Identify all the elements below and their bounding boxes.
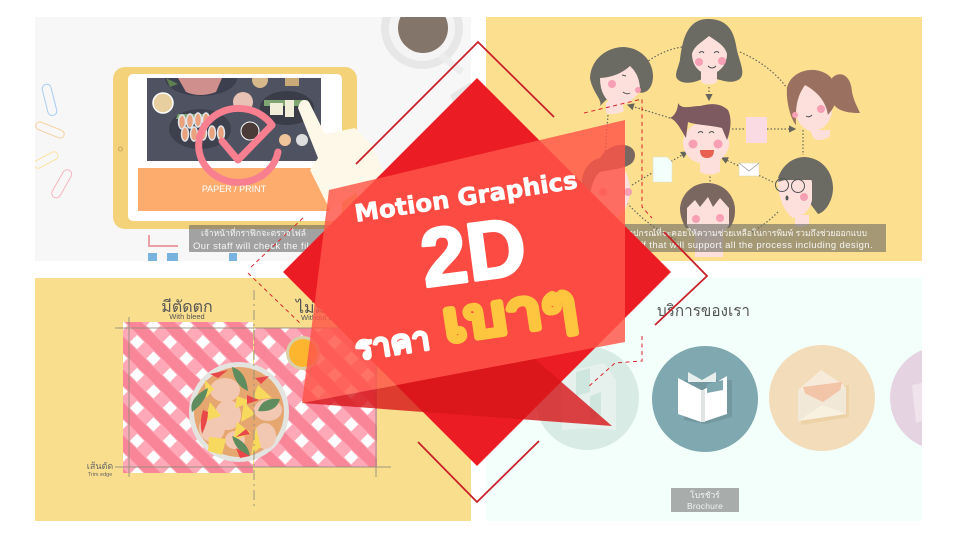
person: centre (670, 103, 731, 174)
trim guide lines (115, 290, 391, 509)
label: trim edge: Trim edge (88, 472, 112, 478)
person: bottom (680, 183, 735, 257)
title text (353, 166, 580, 367)
caption: support staff: experienced staff that will support all the process including design. (567, 240, 873, 251)
label: brochure: Brochure (687, 501, 723, 511)
panel: team network (486, 17, 922, 261)
title: 2D: 2D (415, 201, 531, 305)
caption: staff check: Our staff will check the file (193, 241, 315, 252)
label: trim edge: เส้นตัด (87, 461, 113, 471)
desk items under the tablet (148, 235, 237, 261)
title: price word: ราคา (353, 319, 432, 367)
person: upper left (590, 47, 653, 114)
panel: our services (486, 278, 960, 521)
heading: without bleed: Without bleed (301, 313, 347, 322)
tablecloth without bleed (254, 328, 377, 467)
icon: pink document (746, 117, 767, 143)
heading: without bleed (294, 298, 366, 322)
dotted links (605, 47, 803, 240)
service circle: buildings (535, 346, 639, 450)
translucent banner (302, 120, 625, 403)
band label: PAPER / PRINT (202, 184, 267, 194)
caption: support staff (624, 224, 886, 252)
icon: pointing hand (298, 100, 385, 210)
title: Motion Graphics: Motion Graphics (353, 166, 579, 228)
heading: with bleed: With bleed (169, 312, 205, 321)
label: brochure: โบรชัวร์ (690, 490, 720, 500)
small bowl (286, 336, 320, 370)
caption: staff check (189, 225, 339, 252)
person: top (676, 19, 742, 84)
label: brochure (671, 488, 739, 512)
icon: envelope (739, 163, 759, 176)
panel: bleed and trim (35, 278, 471, 521)
tablet frame (113, 67, 357, 229)
caption: staff check: เจ้าหน้าที่กราฟิกจะตรวจไฟล์ (201, 227, 306, 238)
caption: support staff: ครบครันด้วยอุปกรณ์ที่จะคอยให้ความช่วยเหลือในการพิมพ์ รวมถึงช่วยออกแบบ (581, 227, 867, 239)
title: gentle price word: เบาๆ (438, 272, 580, 354)
banner fold shadow (302, 359, 612, 426)
tablecloth with bleed (123, 322, 253, 473)
orange band (138, 168, 330, 211)
person: right (787, 70, 860, 140)
person: lower right (776, 157, 833, 227)
service circle: partial (890, 350, 922, 446)
label: trim edge (87, 461, 113, 478)
outline diamond corners (356, 42, 707, 502)
person: left, behind banner (582, 145, 635, 220)
service circle: brochure (652, 346, 758, 452)
grey object (450, 82, 471, 102)
heading: without bleed: ไม่มีตัดตก (294, 298, 366, 317)
red diamond (283, 78, 671, 466)
photo of food on tablet (147, 78, 321, 161)
dashed accent lines (248, 99, 652, 388)
icon: white document (653, 157, 672, 182)
heading: with bleed: มีตัดตก (161, 298, 213, 316)
service circle: envelope (769, 345, 875, 451)
tablet screen (128, 74, 342, 221)
icon: paper clips (33, 83, 73, 199)
food bowl (189, 362, 289, 462)
panel: tablet with file check (33, 0, 471, 261)
icon: coffee cup (381, 17, 464, 74)
icon: check mark ring (199, 108, 278, 182)
heading: services: บริการของเรา (657, 303, 750, 320)
